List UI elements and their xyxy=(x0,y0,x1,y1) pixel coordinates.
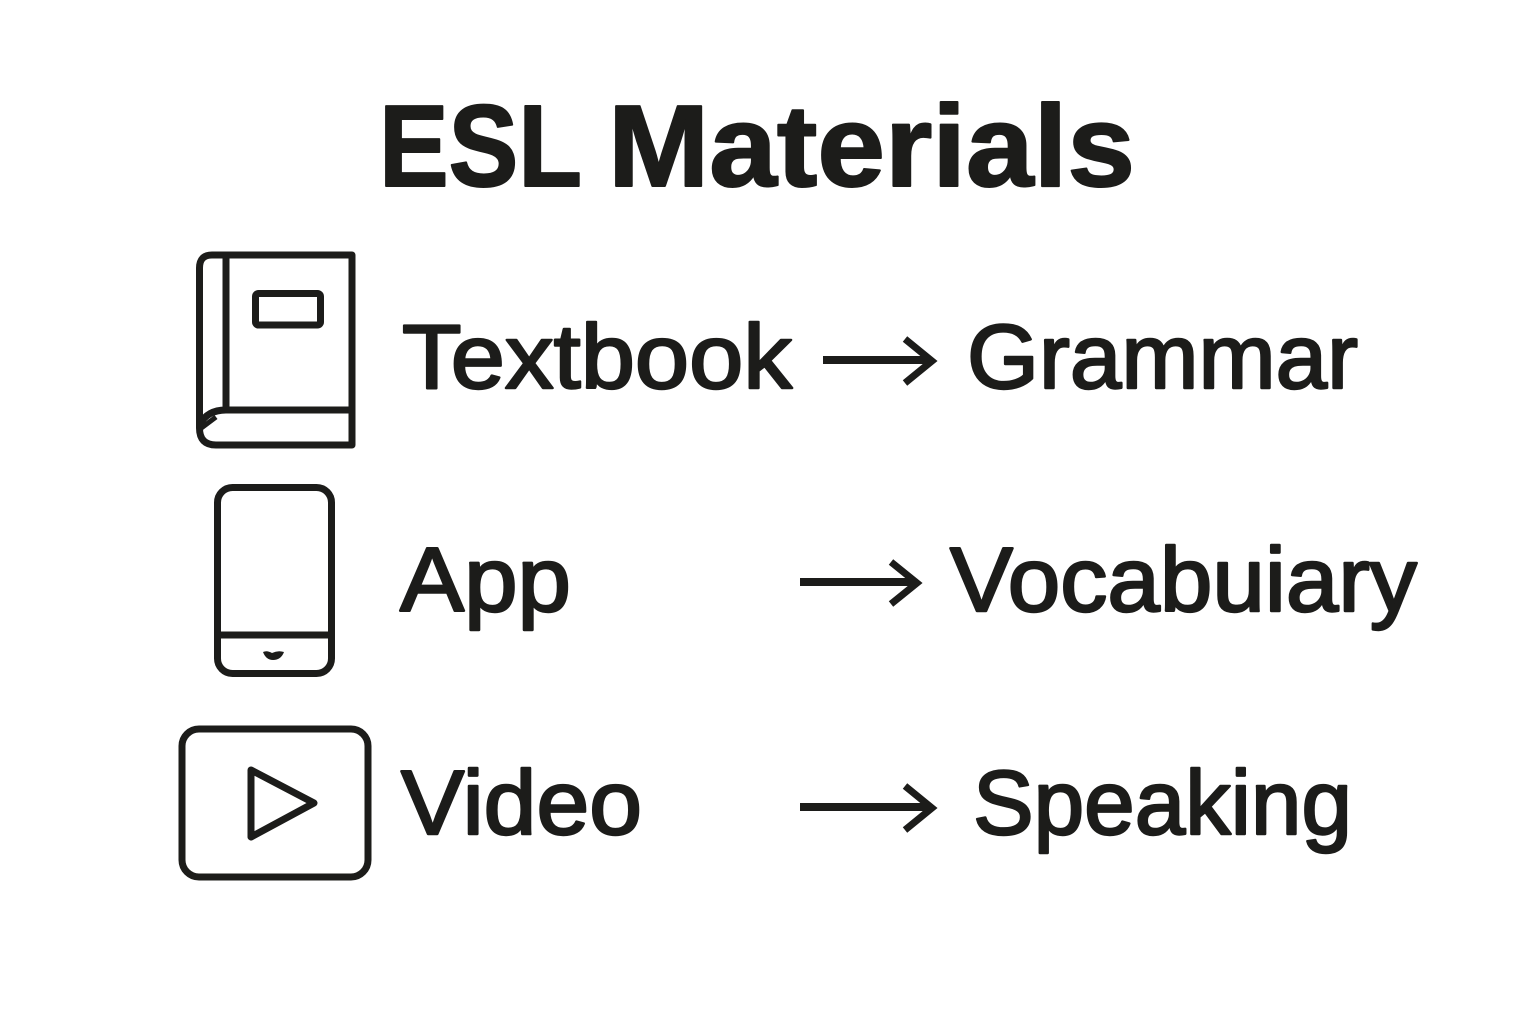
label: Speaking: Speaking xyxy=(973,753,1352,854)
icon: textbook xyxy=(200,255,352,445)
arrow: Textbook to Grammar xyxy=(823,339,932,383)
icon: phone app xyxy=(218,488,332,674)
title: ESL xyxy=(379,81,582,211)
title xyxy=(379,81,1135,211)
title: Materials xyxy=(608,81,1135,211)
label: Vocabuiary: Vocabuiary xyxy=(950,530,1418,631)
label: Video: Video xyxy=(401,753,642,854)
label: Grammar: Grammar xyxy=(967,307,1358,408)
label: App: App xyxy=(400,530,571,631)
arrow: App to Vocabuiary xyxy=(800,562,917,604)
arrow: Video to Speaking xyxy=(800,786,932,830)
icon: video player xyxy=(182,729,368,877)
label: Textbook: Textbook xyxy=(402,307,793,408)
